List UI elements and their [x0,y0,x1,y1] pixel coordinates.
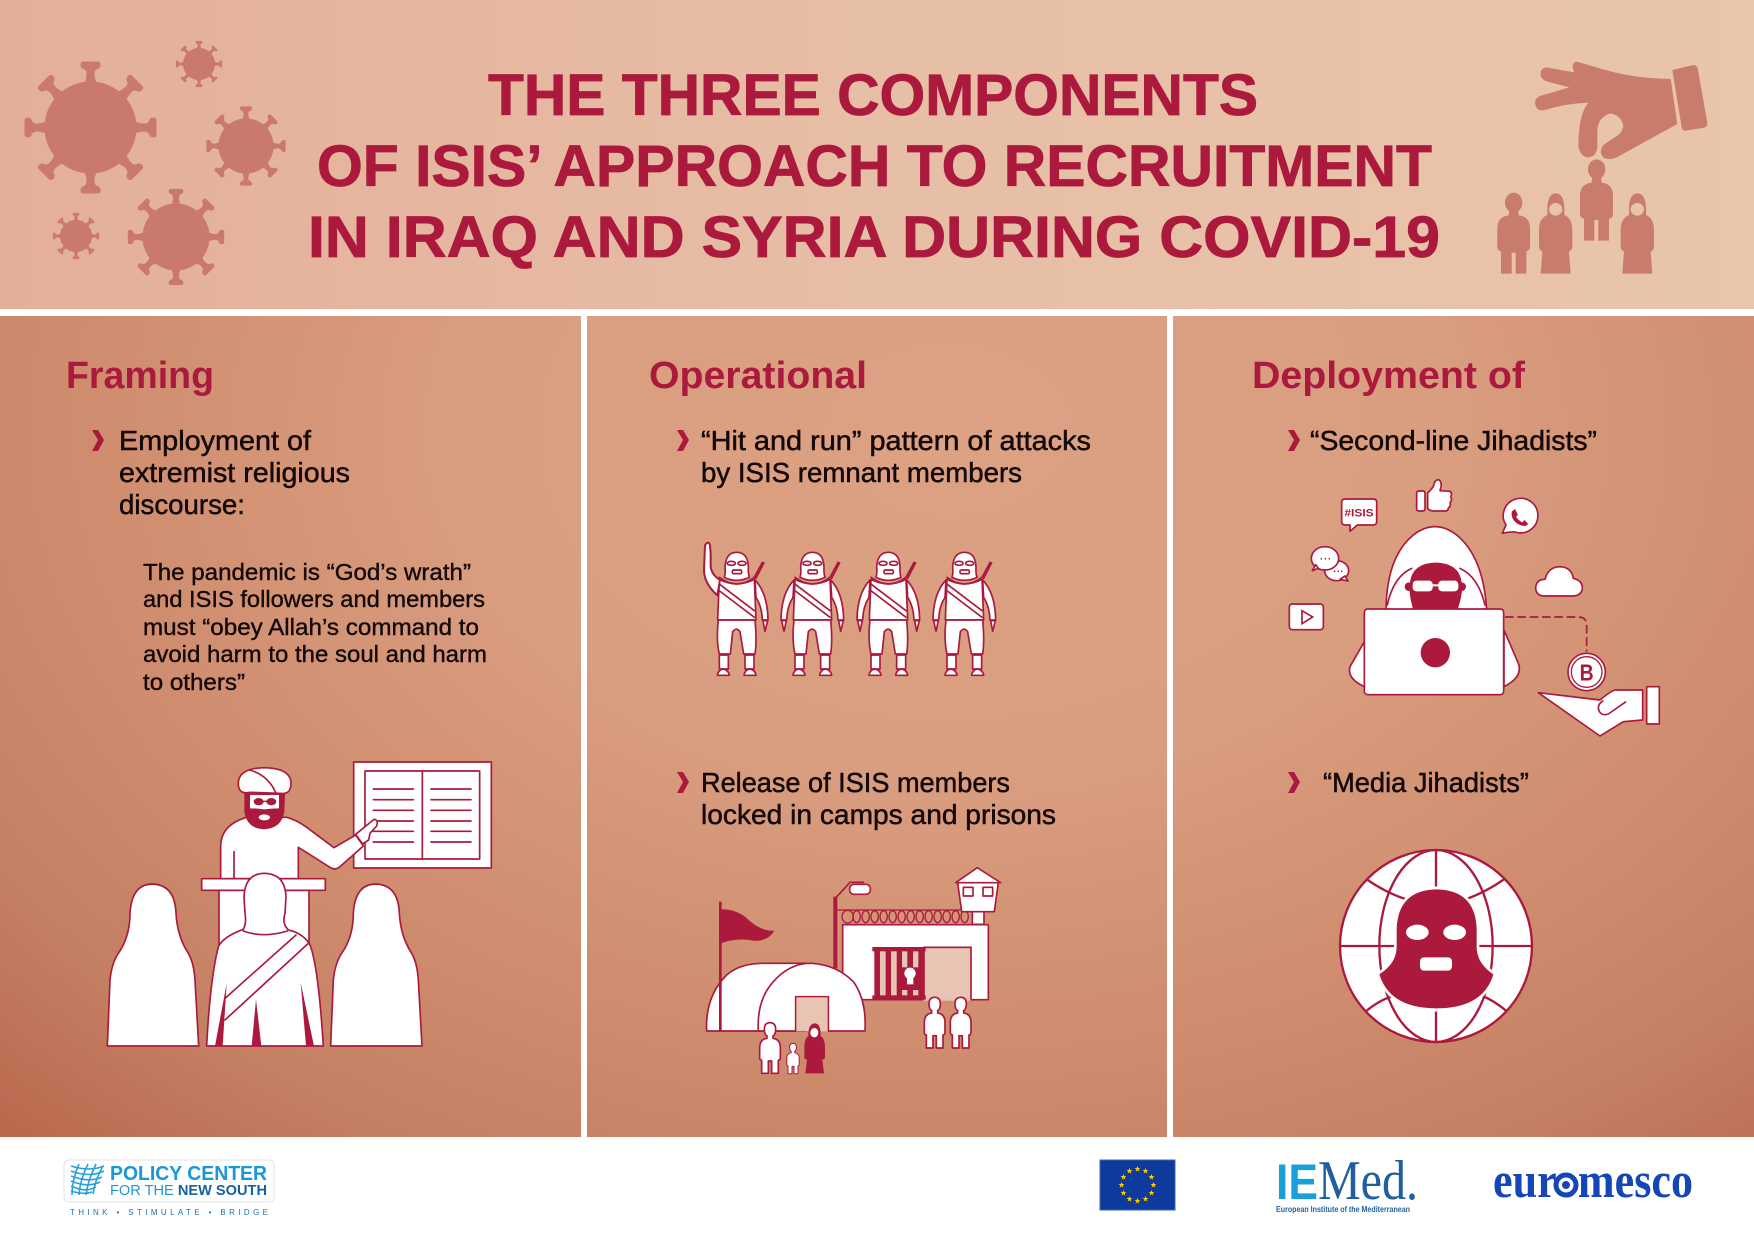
text block: pandemic quote: and ISIS followers and members [143,586,485,612]
title: IN IRAQ AND SYRIA DURING COVID-19 [308,205,1440,270]
laptop [1364,609,1504,695]
logo: IEMed: IE [1276,1154,1318,1210]
hashtag bubble [1342,499,1377,531]
illustration: four masked fighters [704,543,996,675]
chat bubbles [1311,547,1349,581]
phone bubble [1502,498,1538,533]
logo: Policy Center for the New South: FOR THE NEW SOUTH [110,1182,267,1199]
bullet: media jihadists: “Media Jihadists” [1323,767,1529,798]
bullet: religious discourse: Employment of [119,425,311,456]
cloud [1536,567,1582,596]
text block: pandemic quote: avoid harm to the soul and harm [143,641,487,667]
bullet: release of members: locked in camps and prisons [701,799,1056,830]
logo: IEMed: Med. [1318,1150,1418,1212]
bullet: release of members: Release of ISIS members [701,767,1010,798]
panel: deployment background [1173,316,1754,1137]
listener centre [207,873,323,1046]
fighter 2 [781,552,844,675]
fighter with raised arm [704,543,768,675]
lamp post [833,882,870,968]
preacher [221,768,377,879]
text block: pandemic quote: to others” [143,669,245,695]
logo: EuroMeSCo: euromesco [1493,1152,1693,1208]
bullet: religious discourse: discourse: [119,489,245,520]
logo: EU flag [1100,1160,1175,1210]
bitcoin coin: B [1580,659,1594,685]
heading: Operational: Operational [649,355,867,397]
fighter 4 [933,552,996,675]
hashtag bubble: #ISIS [1344,507,1374,519]
panel: framing background [0,316,581,1137]
logo: IEMed: European Institute of the Mediterranean [1276,1204,1410,1214]
bullet: hit and run: by ISIS remnant members [701,457,1022,488]
watch tower [956,868,1001,924]
hooded figure [1349,527,1519,687]
text block: pandemic quote [143,559,487,695]
heading: Framing: Framing [66,355,214,397]
text block: pandemic quote: must “obey Allah’s command to [143,614,479,640]
prison door opening [924,947,971,1000]
bullet: hit and run: “Hit and run” pattern of attacks [701,425,1091,456]
logo: Policy Center for the New South [64,1160,274,1217]
book board [354,762,491,868]
illustration: hooded recruiter at laptop [1289,480,1659,736]
icons: coronavirus cluster [24,41,286,285]
header banner background [0,0,1754,309]
panel: operational background [587,316,1167,1137]
prison wall [843,925,988,1000]
bullet: hit and run [677,425,1091,488]
logo: IEMed [1276,1150,1418,1214]
video play [1289,604,1323,630]
icon: hand picking people [1497,62,1707,274]
dashed link [1505,617,1587,652]
prison gate [872,947,926,1000]
logo: Policy Center for the New South: THINK • STIMULATE • BRIDGE [70,1208,268,1217]
title: OF ISIS’ APPROACH TO RECRUITMENT [317,134,1432,199]
receiving hand [1538,687,1659,736]
text block: pandemic quote: The pandemic is “God’s wrath” [143,559,471,585]
lectern [202,879,325,947]
thumbs up [1417,480,1452,511]
heading: Deployment of: Deployment of [1252,355,1525,397]
logo: Policy Center for the New South: POLICY CENTER [110,1163,268,1185]
bullet: second-line jihadists: “Second-line Jihadists” [1310,425,1597,456]
two released men [924,997,971,1048]
illustration: preacher with audience [107,762,491,1046]
bullet: religious discourse: extremist religious [119,457,350,488]
logo mark: network [71,1164,104,1195]
bullet: religious discourse [92,425,350,520]
family group [760,1023,825,1074]
razor wire [837,910,968,923]
fighter 3 [857,552,920,675]
bullet: release of members [677,767,1056,830]
listener right [331,884,422,1046]
illustration: camp and prison [707,868,1001,1074]
title: THE THREE COMPONENTS [488,63,1258,128]
illustration: masked head on globe [1340,850,1532,1042]
tents [707,902,865,1032]
bitcoin coin [1568,653,1605,691]
listener left [107,884,199,1046]
title [308,63,1440,270]
